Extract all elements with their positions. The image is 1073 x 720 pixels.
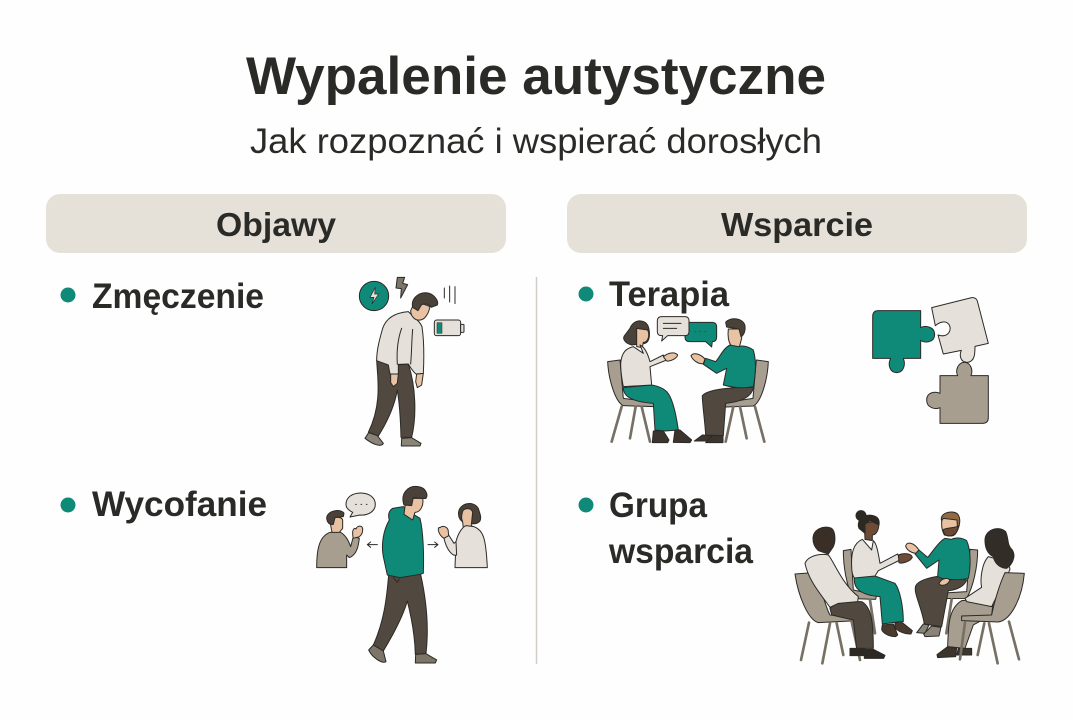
panel header: Objawy bbox=[46, 194, 506, 253]
person: man from behind on left bbox=[795, 527, 885, 663]
list item: Terapia: Terapia bbox=[609, 275, 730, 314]
list item: Grupa wsparcia: wsparcia bbox=[608, 532, 754, 571]
list item: Grupa wsparcia: Grupa bbox=[609, 486, 707, 525]
man on chair bbox=[691, 319, 768, 443]
panel header: Objawy: Objawy bbox=[216, 206, 337, 243]
puzzle piece: taupe bbox=[927, 362, 988, 423]
puzzle piece: teal bbox=[873, 311, 935, 373]
right person bbox=[438, 504, 487, 568]
person: bearded man in teal bbox=[906, 512, 970, 637]
illustration: support group of four bbox=[795, 511, 1024, 663]
illustration: therapy conversation bbox=[608, 317, 768, 443]
speech bubbles bbox=[657, 317, 717, 347]
list item: Grupa wsparcia bbox=[578, 486, 754, 571]
left person with speech bubble bbox=[317, 493, 375, 568]
illustration: exhausted man with low battery bbox=[359, 277, 464, 446]
woman on chair bbox=[608, 321, 692, 443]
icon: low battery bbox=[434, 320, 464, 336]
column divider bbox=[536, 277, 538, 664]
chair: right front bbox=[960, 573, 1024, 663]
person: woman with bun bbox=[852, 511, 912, 637]
list item: Zmęczenie: Zmęczenie bbox=[92, 277, 264, 316]
panel header: Wsparcie: Wsparcie bbox=[721, 206, 873, 243]
title: Wypalenie autystyczne bbox=[246, 47, 826, 106]
icon: falling lines bbox=[444, 286, 455, 304]
illustration: puzzle pieces bbox=[873, 298, 988, 423]
man figure bbox=[365, 293, 438, 446]
person: woman with long hair from behind bbox=[937, 529, 1014, 658]
icon: grey lightning bbox=[396, 277, 408, 298]
subtitle: Jak rozpoznać i wspierać dorosłych bbox=[250, 122, 822, 161]
arrows pointing apart bbox=[367, 542, 438, 547]
puzzle piece: light bbox=[932, 298, 988, 362]
illustration: withdrawn man walking away from two people bbox=[317, 486, 487, 663]
central figure in teal hoodie bbox=[369, 486, 437, 663]
panel header: Wsparcie bbox=[567, 194, 1027, 253]
back chairs bbox=[843, 549, 978, 633]
icon: teal energy badge bbox=[359, 281, 389, 311]
list item: Wycofanie: Wycofanie bbox=[92, 485, 267, 524]
